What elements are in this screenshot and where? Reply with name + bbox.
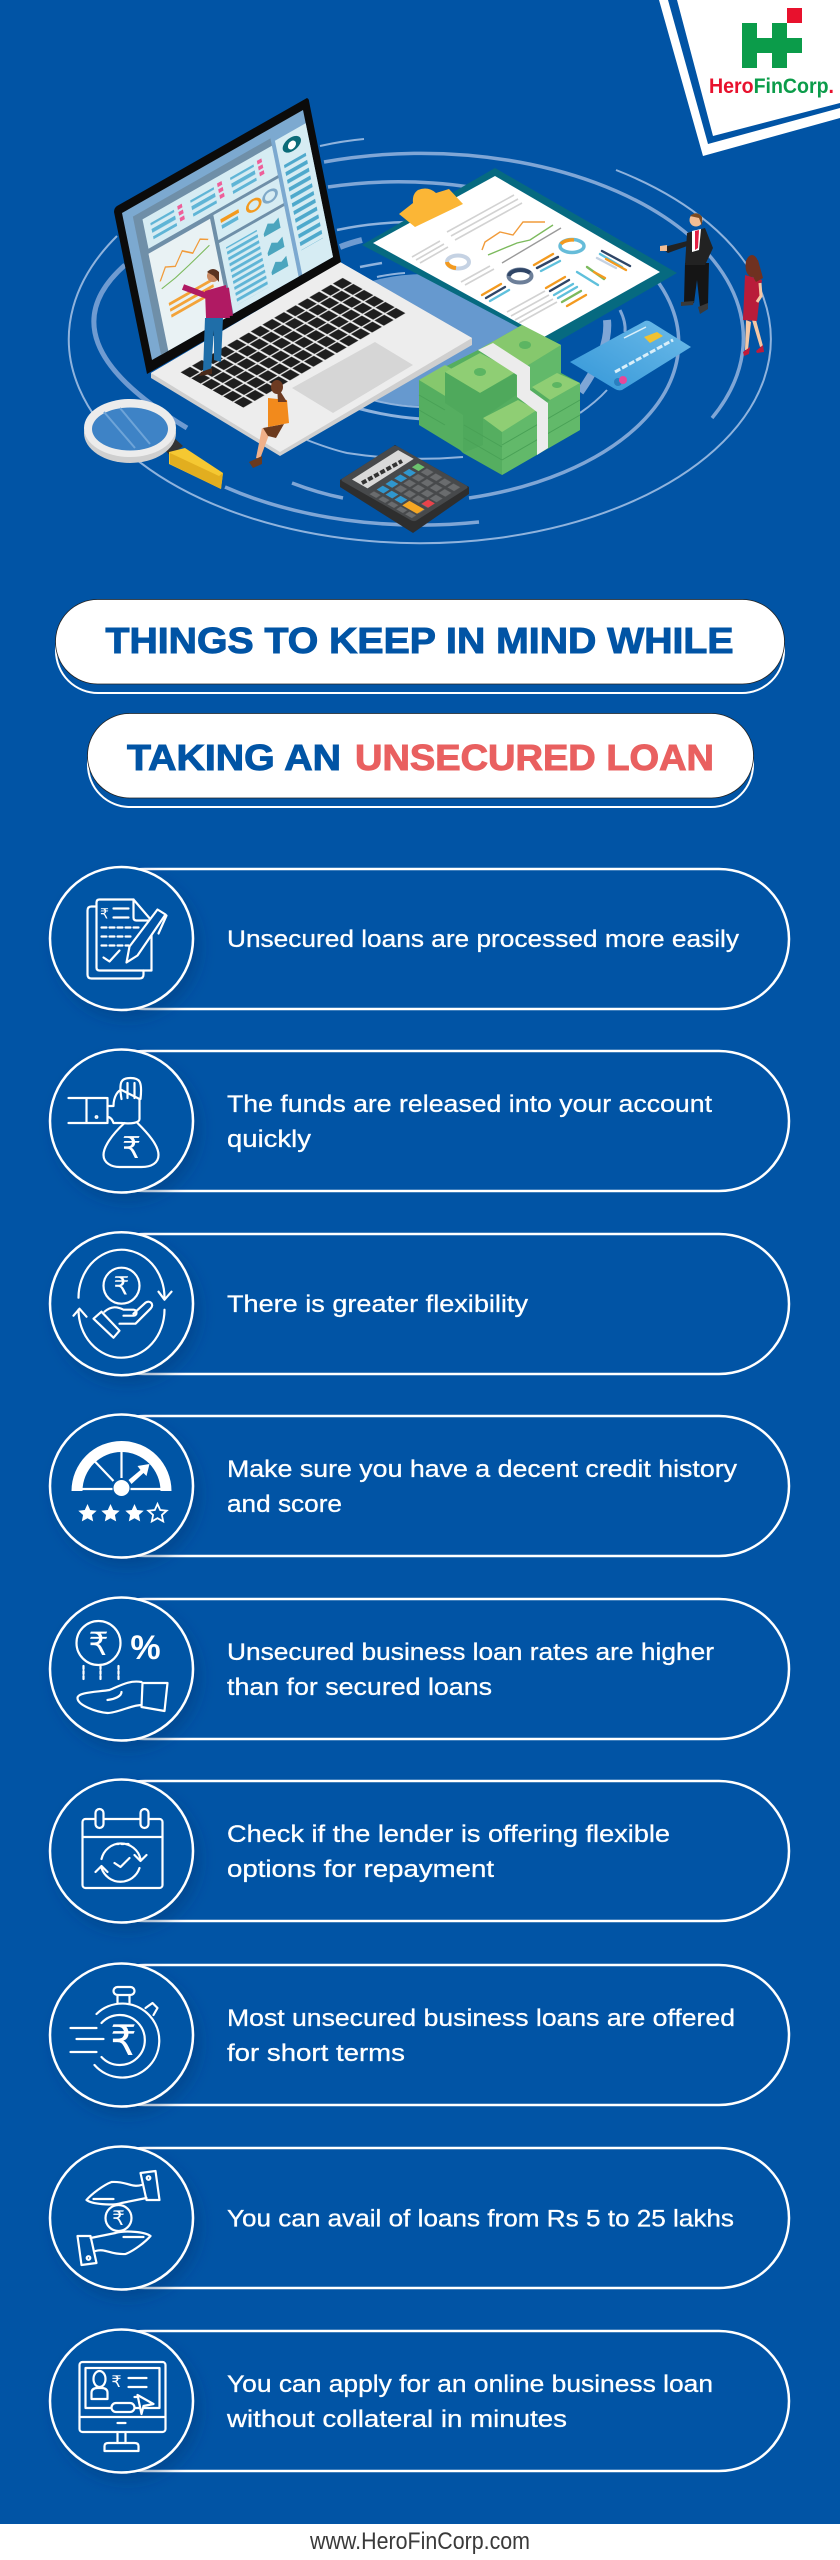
- figure: businessman: [660, 213, 713, 314]
- text: row 5: [227, 1639, 714, 1701]
- text: row 6: options for repayment: [227, 1856, 494, 1883]
- text: row 2: quickly: [227, 1126, 312, 1153]
- text: row 9: You can apply for an online business loan: [227, 2371, 713, 2398]
- icon: two hands around coin: ₹: [112, 2206, 125, 2230]
- icon: coin and percent over hand: ₹: [88, 1625, 109, 1663]
- text: row 4: [227, 1456, 738, 1518]
- hero illustration: [69, 98, 771, 543]
- keyboard: [180, 277, 407, 408]
- icon: coin over hand with cycle arrows: [74, 1250, 172, 1358]
- icon: coin over hand with cycle arrows: ₹: [114, 1272, 129, 1301]
- report grey text lines: [412, 195, 557, 323]
- figure: sitting woman: [249, 380, 289, 468]
- laptop: [114, 98, 472, 456]
- row 2: [50, 1050, 789, 1192]
- text: row 6: [227, 1821, 670, 1883]
- logo badge: [659, 0, 840, 156]
- trackpad: [292, 342, 413, 413]
- footer: [0, 2524, 840, 2560]
- laptop base: [151, 262, 472, 456]
- icon: stopwatch with rupee: ₹: [110, 2016, 137, 2065]
- text: row 4: Make sure you have a decent credit history: [227, 1456, 738, 1483]
- figure: man at screen: [183, 269, 230, 376]
- icon: coin and percent over hand: %: [130, 1629, 161, 1667]
- heading line 2: [88, 714, 754, 807]
- icon: credit card: [570, 321, 691, 390]
- paper band: [478, 343, 548, 455]
- text: row 5: Unsecured business loan rates are higher: [227, 1639, 714, 1666]
- icon: stopwatch with rupee: [70, 1987, 159, 2078]
- line chart: [482, 222, 561, 263]
- heading line 1: THINGS TO KEEP IN MIND WHILE: [106, 620, 734, 661]
- text: row 7: Most unsecured business loans are offered: [227, 2005, 735, 2032]
- text: row 2: The funds are released into your account: [227, 1091, 712, 1118]
- icon: document and pen: [88, 900, 166, 978]
- row 7: [50, 1964, 789, 2106]
- icon: hand with money bag: ₹: [122, 1131, 141, 1166]
- text: row 9: without collateral in minutes: [226, 2406, 567, 2433]
- icon: hand with money bag: [68, 1078, 158, 1167]
- clip: [399, 189, 463, 227]
- laptop screen dashboard: [122, 110, 333, 360]
- row 1: [50, 867, 789, 1010]
- row 5: [50, 1598, 789, 1740]
- text: row 7: for short terms: [227, 2040, 405, 2067]
- text: row 5: than for secured loans: [227, 1674, 492, 1701]
- icon: computer with online application: [80, 2362, 166, 2451]
- row 4: [50, 1414, 789, 1558]
- icon: coin and percent over hand: [76, 1621, 168, 1713]
- text: row 6: Check if the lender is offering flexible: [227, 1821, 670, 1848]
- heading line 2: UNSECURED LOAN: [355, 737, 714, 778]
- text: row 1: Unsecured loans are processed more easily: [227, 926, 740, 953]
- row 8: [50, 2146, 789, 2290]
- text: row 2: [227, 1091, 712, 1153]
- icon: calculator: [340, 445, 469, 533]
- icon: computer with online application: ₹: [111, 2372, 122, 2391]
- icon: credit score gauge with stars: [72, 1441, 172, 1521]
- text: row 9: [226, 2371, 713, 2433]
- icon: magnifying glass: [84, 399, 223, 489]
- orbit rings: [69, 139, 771, 543]
- heading line 2: TAKING AN: [127, 737, 341, 778]
- row 9: [50, 2330, 789, 2472]
- text: row 4: and score: [227, 1491, 342, 1518]
- icon: document and pen: ₹: [100, 906, 109, 922]
- icon: calendar with cycle check: [82, 1809, 162, 1888]
- logo mark: [742, 8, 802, 68]
- clipboard with report: [362, 168, 677, 345]
- footer: www.HeroFinCorp.com: [309, 2528, 530, 2555]
- heading line 1: [56, 600, 784, 693]
- donut charts: [447, 240, 584, 282]
- text: row 3: There is greater flexibility: [227, 1291, 529, 1318]
- bar groups: [482, 251, 630, 306]
- row 6: [50, 1780, 789, 1922]
- laptop screen frame: [114, 98, 341, 374]
- text: row 8: You can avail of loans from Rs 5 to 25 lakhs: [227, 2206, 734, 2232]
- text: row 7: [227, 2005, 735, 2067]
- figure: woman in red: [743, 255, 764, 356]
- row 3: [50, 1232, 789, 1375]
- icon: two hands around coin: [78, 2171, 160, 2265]
- logo wordmark: HeroFinCorp.: [709, 75, 834, 98]
- icon: cash stacks: [419, 325, 580, 475]
